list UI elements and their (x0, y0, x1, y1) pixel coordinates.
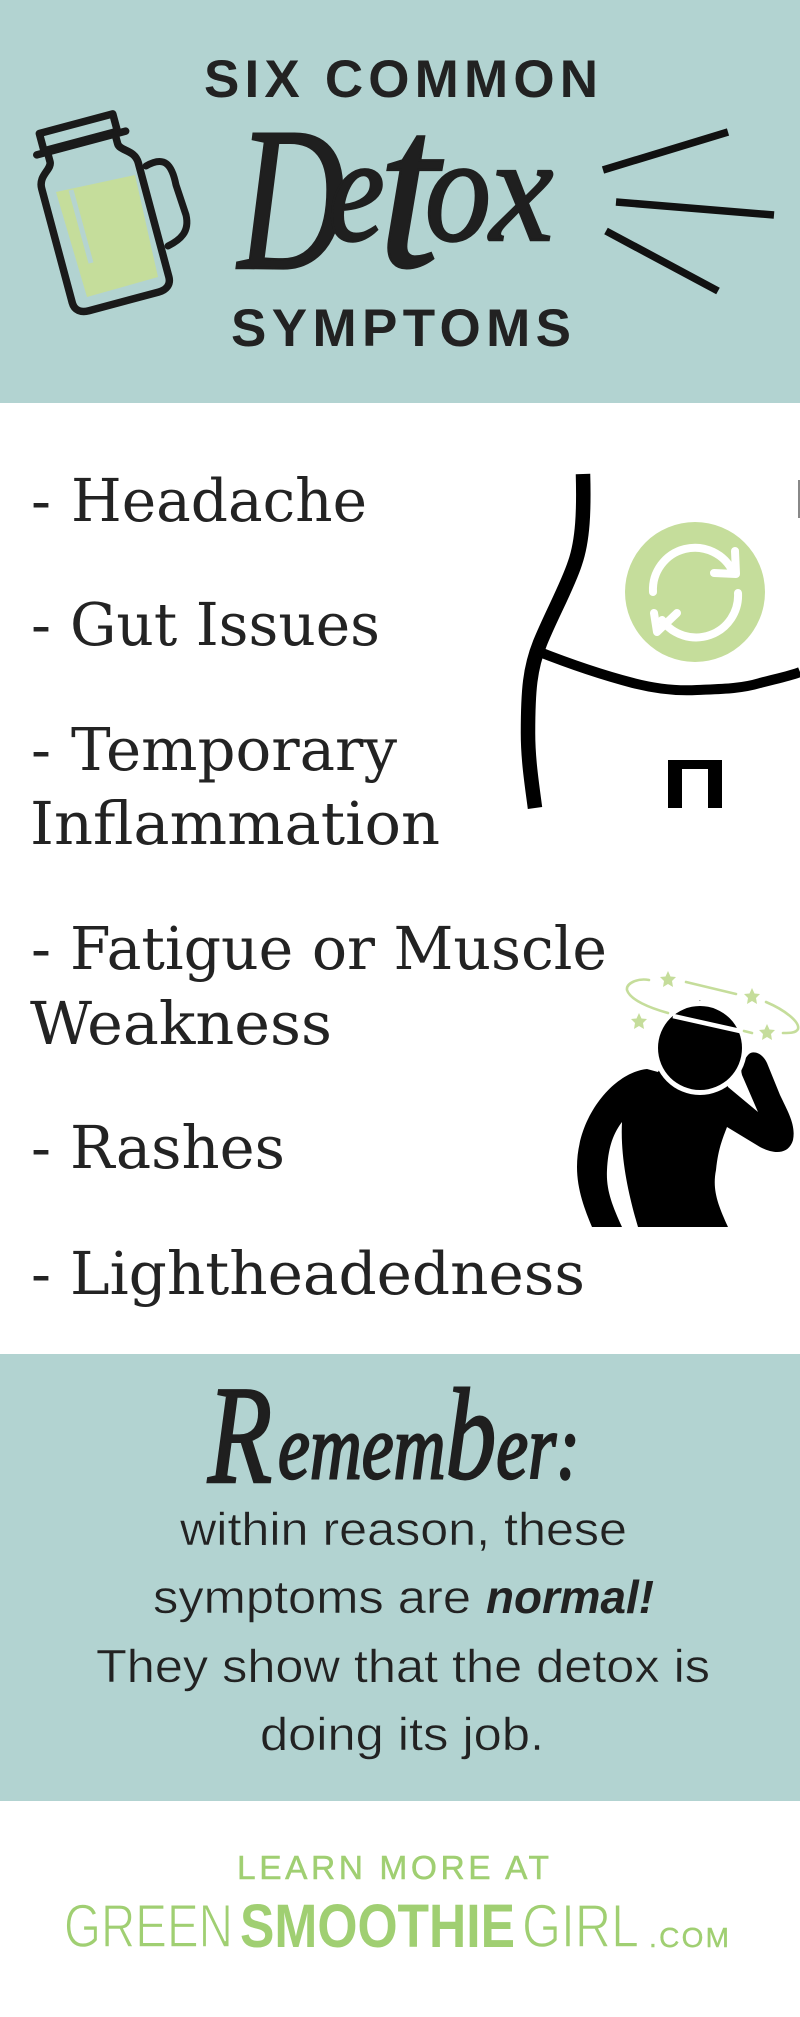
list item: lightheadedness: Lightheadedness (70, 1239, 585, 1308)
list item: lightheadedness: - (31, 1239, 51, 1308)
heading: detox script: o (425, 106, 491, 273)
list item: gut issues: - (31, 590, 51, 659)
list item: temporary inflammation: Temporary (71, 715, 398, 784)
list item: rashes: Rashes (70, 1113, 285, 1182)
list item: fatigue or muscle weakness (30, 914, 607, 1058)
heading: detox script: e (328, 107, 385, 273)
list item: rashes: - (31, 1113, 51, 1182)
icon: torso with gut cycle (528, 474, 800, 808)
panel: remember (0, 1354, 800, 1801)
heading: remember script: R (207, 1358, 272, 1513)
text: learn more at: LEARN MORE AT (237, 1850, 549, 1887)
icon: green cycle circle (625, 522, 765, 662)
icon: burst lines (603, 132, 774, 291)
icon: jar with green juice (28, 111, 187, 314)
heading: symptoms: SYMPTOMS (231, 299, 571, 358)
text: greensmoothiegirl logo: SMOOTHIE (240, 1892, 515, 1960)
heading: detox script (236, 61, 553, 316)
list item: temporary inflammation (30, 715, 440, 858)
text: greensmoothiegirl logo: GIRL (522, 1892, 639, 1960)
text: reassurance message: normal! (486, 1571, 654, 1623)
list item: headache: Headache (71, 466, 367, 535)
heading: detox script: t (378, 61, 443, 316)
text: greensmoothiegirl logo: .COM (649, 1922, 729, 1953)
heading: six common: SIX COMMON (204, 50, 598, 109)
text: reassurance message: within reason, these (179, 1503, 627, 1555)
text: greensmoothiegirl logo (64, 1892, 729, 1960)
panel: symptoms list (30, 466, 607, 1308)
icon: dizzy person (577, 971, 798, 1227)
text: greensmoothiegirl logo: GREEN (64, 1892, 233, 1960)
heading: detox script: x (488, 107, 553, 273)
list item: fatigue or muscle weakness: Fatigue or Muscle (70, 914, 607, 983)
list item: headache: - (31, 466, 51, 535)
text: reassurance message: They show that the detox is (96, 1640, 710, 1692)
text: reassurance message: symptoms are (153, 1571, 471, 1623)
dizzy orbit and stars (627, 971, 798, 1040)
heading: detox script: D (236, 86, 345, 313)
list item: fatigue or muscle weakness: - (31, 914, 51, 983)
panel: footer (64, 1850, 729, 1960)
panel: header (0, 0, 800, 403)
list item: temporary inflammation: - (31, 715, 51, 784)
list item: gut issues: Gut Issues (70, 590, 380, 659)
text: reassurance message (96, 1503, 710, 1760)
text: reassurance message: doing its job. (260, 1708, 544, 1760)
list item: temporary inflammation: Inflammation (30, 789, 440, 858)
list item: fatigue or muscle weakness: Weakness (30, 989, 332, 1058)
heading: remember script: emember: (278, 1363, 580, 1507)
